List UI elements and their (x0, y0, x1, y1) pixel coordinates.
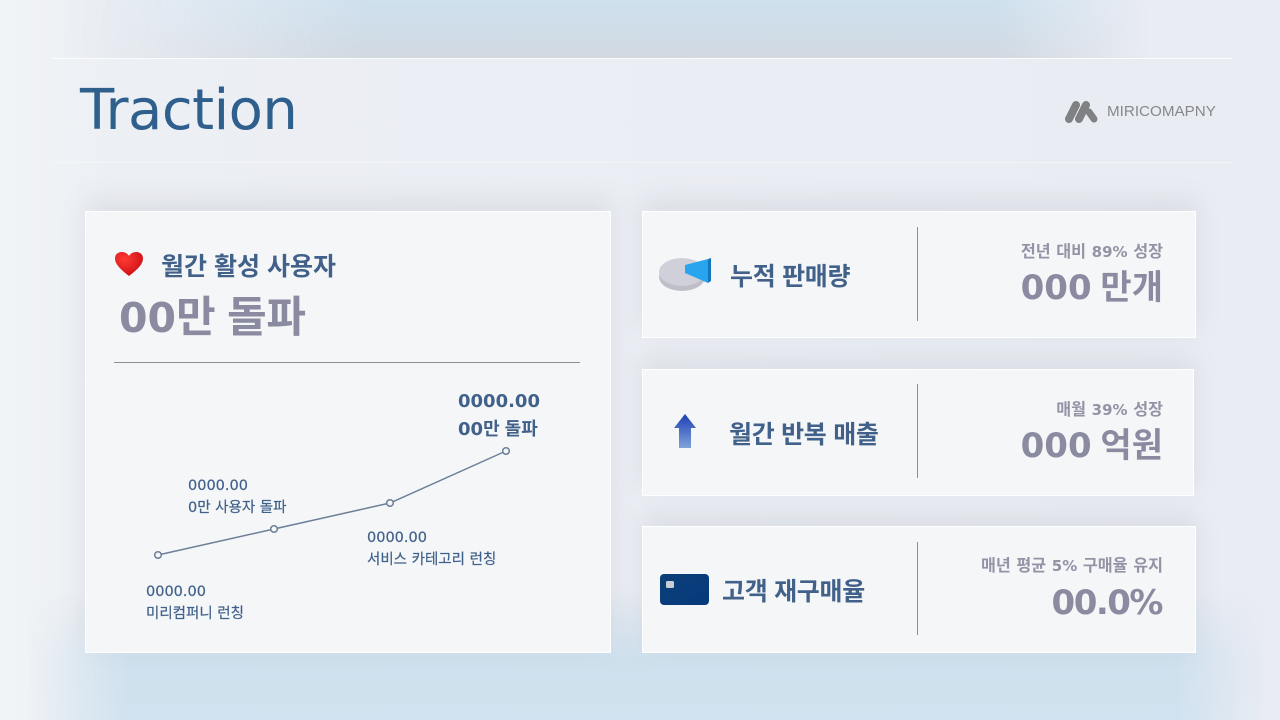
data label: latest: 00만 돌파 (458, 415, 538, 441)
data label: service category launch (367, 530, 496, 568)
separator (917, 384, 918, 478)
title: Traction (80, 78, 297, 143)
growth note: 매년 평균 5% 구매율 유지 (981, 556, 1163, 575)
data label: 0만 users (188, 478, 286, 516)
data label: 0만 users: 0만 사용자 돌파 (188, 500, 286, 516)
icon: pie chart (659, 258, 711, 291)
panel: monthly active users (85, 211, 611, 653)
panel: cumulative sales (642, 211, 1196, 338)
data label: service category launch: 0000.00 (367, 530, 427, 546)
divider (114, 362, 580, 363)
label: monthly recurring revenue: 월간 반복 매출 (729, 415, 879, 451)
icon: credit card (660, 574, 709, 605)
icon: up arrow (674, 414, 696, 448)
label: cumulative sales: 누적 판매량 (730, 257, 850, 293)
data label: company launch: 0000.00 (146, 584, 206, 600)
icon: logo mark (1065, 101, 1098, 123)
value: 00.0% (1052, 583, 1162, 623)
value: passed 00만: 00만 돌파 (119, 283, 306, 345)
data label: company launch (146, 584, 244, 622)
value: 000 만개 (1021, 268, 1163, 308)
line chart (154, 447, 510, 559)
panel: customer repurchase rate (642, 526, 1196, 653)
panel: monthly recurring revenue (642, 369, 1194, 496)
data label: 0만 users: 0000.00 (188, 478, 248, 494)
icon: heart (115, 252, 143, 276)
label: repurchase rate: 고객 재구매율 (722, 572, 865, 608)
growth note: 매월 39% 성장 (1056, 400, 1163, 419)
logo text: MIRICOMAPNY (1107, 103, 1216, 120)
value: 000 억원 (1021, 426, 1163, 466)
data label: service category launch: 서비스 카테고리 런칭 (367, 552, 496, 568)
separator (917, 542, 918, 635)
logo: MIRICOMAPNY (1065, 101, 1216, 123)
data label: latest (458, 391, 540, 441)
growth note: 전년 대비 89% 성장 (1021, 242, 1163, 261)
separator (917, 227, 918, 321)
data label: latest: 0000.00 (458, 391, 540, 412)
heading: monthly active users: 월간 활성 사용자 (161, 247, 336, 283)
data label: company launch: 미리컴퍼니 런칭 (146, 606, 244, 622)
